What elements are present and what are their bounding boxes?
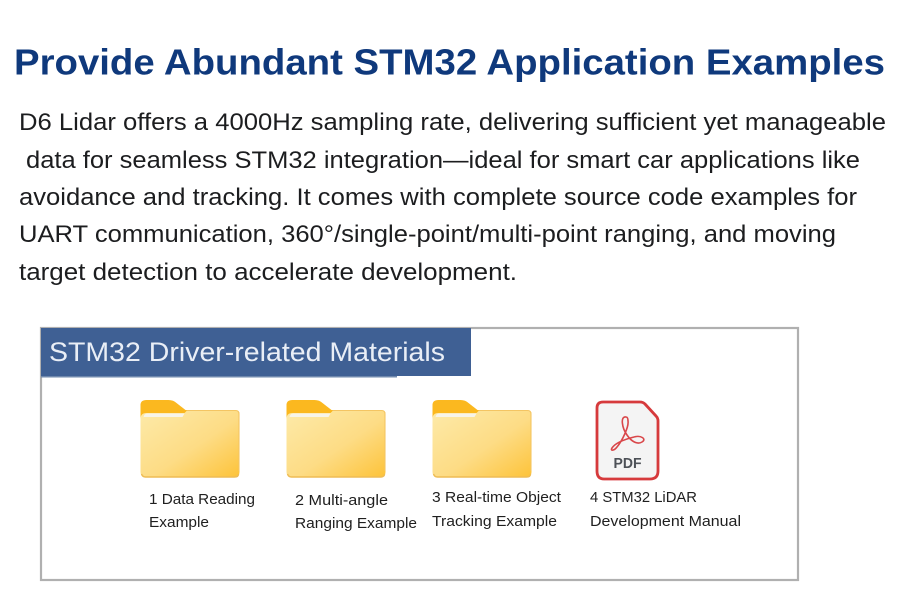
icon: PDF document (597, 402, 658, 479)
label: item 3: Tracking Example (432, 513, 557, 530)
label: item 4 (590, 489, 741, 530)
label: item 4: Development Manual (590, 513, 741, 530)
label: item 1: Example (149, 514, 209, 531)
label: item 4: 4 STM32 LiDAR (590, 489, 697, 506)
label: item 3: 3 Real-time Object (432, 489, 562, 506)
panel: STM32 driver materials (41, 328, 798, 580)
text block: description: target detection to accelerate development. (19, 259, 517, 286)
label: item 2: 2 Multi-angle (295, 492, 388, 509)
text block: description (19, 109, 886, 286)
label: item 3 (432, 489, 562, 530)
icon: folder 2 (286, 400, 386, 477)
label: item 2 (295, 492, 417, 532)
icon: folder 3 (432, 400, 532, 477)
title: Provide Abundant STM32 Application Examples (14, 42, 885, 82)
label: item 1: 1 Data Reading (149, 491, 255, 508)
label: item 1 (149, 491, 255, 531)
label: item 2: Ranging Example (295, 515, 417, 532)
text block: description: data for seamless STM32 integration—ideal for smart car applications like (26, 147, 860, 174)
panel frame (41, 328, 798, 580)
panel header: STM32 Driver-related Materials (49, 337, 445, 367)
panel header (41, 328, 471, 378)
text block: description: UART communication, 360°/single-point/multi-point ranging, and moving (19, 221, 836, 248)
icon: folder 1 (140, 400, 240, 477)
text block: description: avoidance and tracking. It comes with complete source code examples for (19, 184, 857, 211)
text block: description: D6 Lidar offers a 4000Hz sampling rate, delivering sufficient yet manageable (19, 109, 886, 136)
icon: PDF document: PDF (614, 455, 642, 472)
